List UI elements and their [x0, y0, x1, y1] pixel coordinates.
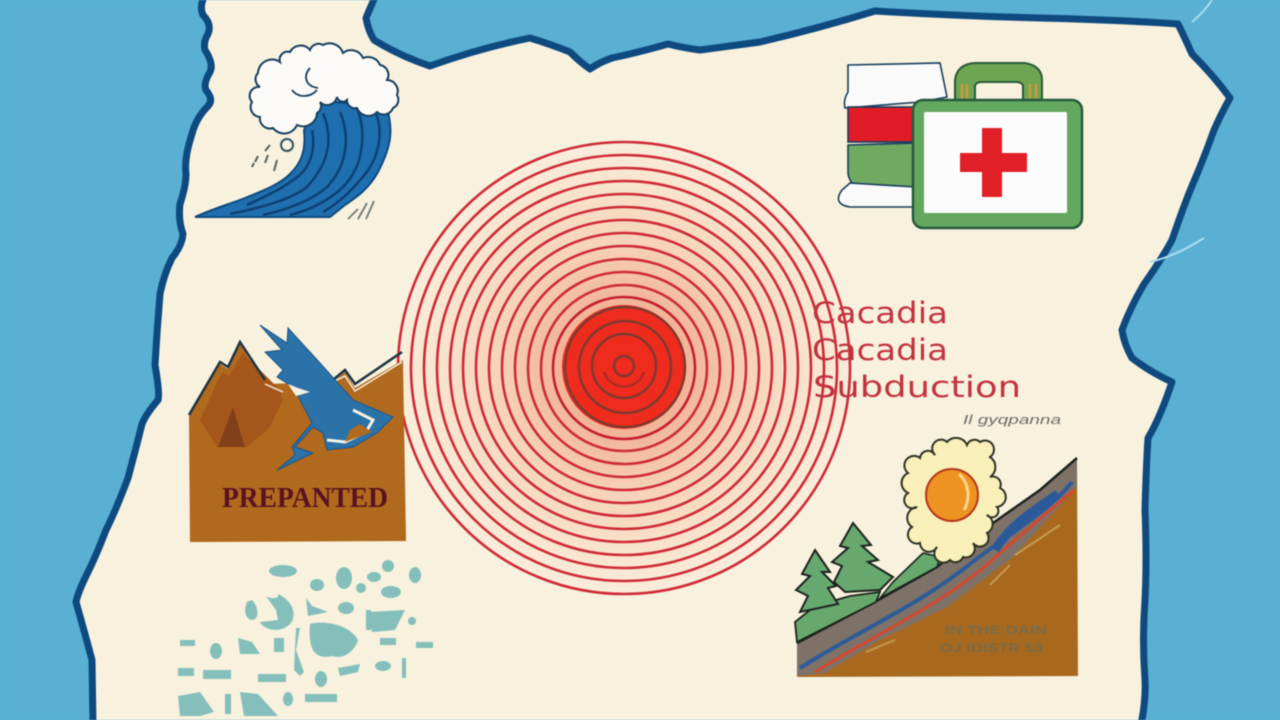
hillside text: IN THE DAIN: [945, 623, 1047, 637]
label: Cascadia subduction: Subduction: [813, 370, 1021, 404]
faded map legend glyphs: [178, 560, 433, 716]
kit white panel: [924, 112, 1067, 213]
caption above hillside: Il gyqpanna: [963, 412, 1061, 427]
icon: landslide panel: [189, 325, 406, 542]
red cross: [960, 128, 1027, 197]
label: Cascadia subduction: Cacadia: [812, 333, 948, 367]
supply stack: [838, 63, 947, 207]
icon: hillside cross-section: [795, 438, 1078, 677]
label: Cascadia subduction: [812, 296, 1021, 404]
sun: [902, 438, 1006, 563]
lightning fault: [260, 325, 393, 470]
icon: hillside cross-section: OJ IDISTR 53: [940, 641, 1043, 655]
icon: first aid supplies: [838, 63, 1082, 228]
panel text: PREPANTED: [222, 482, 388, 514]
grass and trees: [880, 553, 940, 598]
label: Cascadia subduction: Cacadia: [812, 296, 948, 330]
epicentre rings: [398, 142, 850, 594]
kit case: [913, 100, 1082, 228]
coast highlights: [1150, 0, 1212, 262]
kit handle: [955, 63, 1042, 103]
icon: tsunami wave: [195, 43, 398, 219]
wave foam: [250, 43, 398, 134]
